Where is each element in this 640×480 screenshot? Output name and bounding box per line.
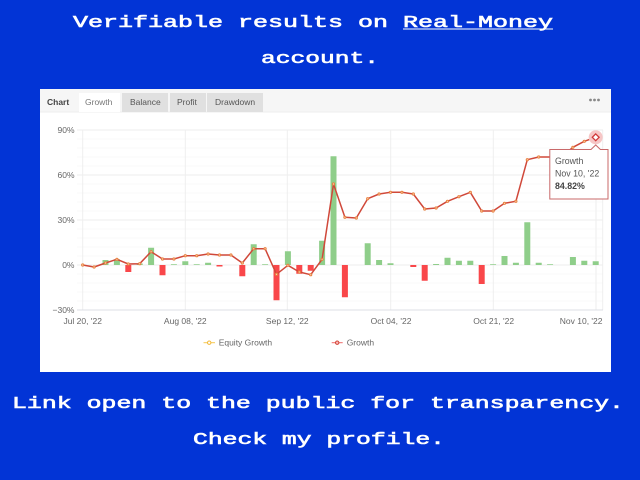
y axis labels: 0% (62, 260, 75, 270)
panel: chart screenshot (40, 89, 611, 372)
red loss bars (125, 265, 485, 300)
legend: equity growth: Equity Growth (219, 338, 272, 348)
highlighted last point (589, 130, 603, 144)
title: first line: Verifiable results on Real-Money (73, 14, 553, 33)
title: second line: account. (261, 50, 379, 69)
tab bar: Drawdown (215, 97, 255, 107)
x axis labels: Jul 20, '22 (63, 316, 102, 326)
x axis labels: Nov 10, '22 (560, 316, 603, 326)
tab bar: Chart (47, 97, 69, 107)
tab bar: Balance (130, 97, 161, 107)
chart: growth combo chart (53, 125, 608, 326)
x axis labels: Aug 08, '22 (164, 316, 207, 326)
caption: first line: Link open to the public for transparency. (12, 395, 624, 414)
legend: growth (332, 338, 374, 348)
y axis labels: 30% (57, 215, 75, 225)
caption: second line: Check my profile. (193, 431, 445, 450)
y axis labels: 60% (57, 170, 75, 180)
icon: more menu dots (589, 99, 600, 101)
x axis labels: Oct 21, '22 (473, 316, 514, 326)
x axis labels: Oct 04, '22 (371, 316, 412, 326)
y axis labels: −30% (53, 305, 75, 315)
tab bar: Profit (177, 97, 197, 107)
tab bar: Growth (85, 97, 113, 107)
line markers (83, 141, 584, 275)
legend: growth: Growth (347, 338, 374, 348)
growth line (83, 137, 596, 275)
tooltip (550, 145, 608, 199)
tooltip: Growth (555, 156, 583, 166)
tooltip: Nov 10, '22 (555, 168, 599, 178)
x axis labels (63, 316, 603, 326)
green profit bars (102, 156, 599, 265)
tab bar (40, 89, 611, 112)
x axis labels: Sep 12, '22 (266, 316, 309, 326)
tooltip: 84.82% (555, 181, 585, 191)
y axis labels: 90% (57, 125, 75, 135)
y axis labels (53, 125, 75, 315)
